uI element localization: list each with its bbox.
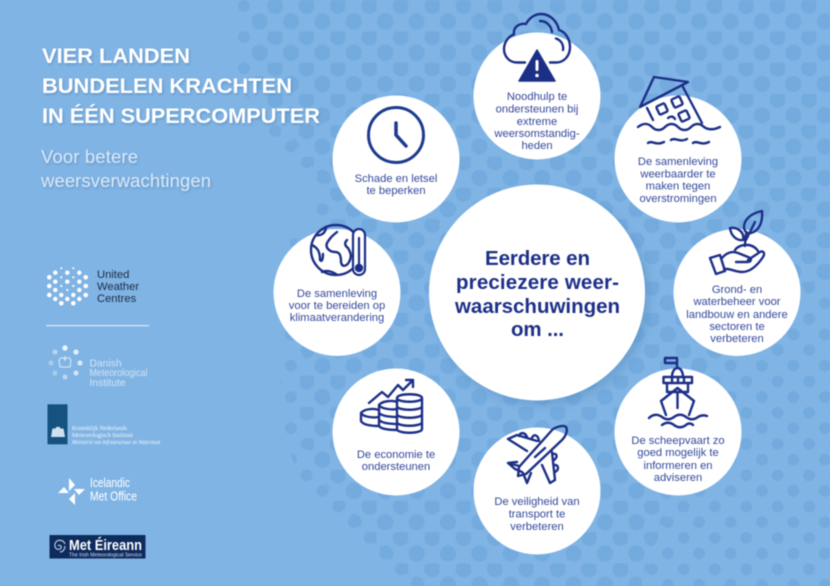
title: VIER LANDEN xyxy=(42,44,190,68)
title: IN ÉÉN SUPERCOMPUTER xyxy=(42,103,320,128)
panel: central message xyxy=(429,184,649,405)
text: emergency aid: weersomstandig- xyxy=(493,128,580,140)
panel: shipping xyxy=(614,358,742,496)
logo: Met Eireann xyxy=(50,535,146,558)
panel: emergency aid xyxy=(474,14,600,160)
icon: clock xyxy=(368,108,424,162)
heading: central text: Eerdere en xyxy=(485,247,590,270)
text: land and water management: sectoren te xyxy=(709,321,765,333)
panel: damage and injury xyxy=(332,96,460,222)
subtitle: weersverwachtingen xyxy=(40,170,211,191)
text: economy: De economie te xyxy=(357,449,435,461)
text: emergency aid: ondersteunen bij xyxy=(496,104,578,116)
heading: central text: preciezere weer- xyxy=(456,271,619,294)
text: emergency aid xyxy=(493,91,580,152)
subtitle xyxy=(40,146,211,191)
icon: cloud with warning xyxy=(504,14,570,81)
panel: economy xyxy=(332,368,460,496)
text: flood resilience: overstromingen xyxy=(639,193,717,205)
logo: Icelandic Met Office: Icelandic xyxy=(90,476,130,490)
text: transport safety: verbeteren xyxy=(510,521,564,533)
logo: KNMI: Ministerie van Infrastructuur en Waterstaat xyxy=(71,439,160,446)
logo: United Weather Centres xyxy=(47,267,139,306)
logo: Danish Meteorological Institute: Institute xyxy=(90,378,126,389)
text: transport safety: De veiligheid van xyxy=(494,496,580,508)
panel: transport safety xyxy=(474,426,600,554)
icon: airplane xyxy=(508,426,567,483)
text: land and water management: waterbeheer voor xyxy=(692,296,781,308)
panel: land and water management xyxy=(674,211,800,356)
text: climate change: klimaatverandering xyxy=(290,312,384,324)
text: transport safety xyxy=(494,496,580,533)
text: climate change: De samenleving xyxy=(297,288,377,300)
text: transport safety: transport te xyxy=(509,508,565,520)
text: land and water management: landbouw en andere xyxy=(686,309,788,321)
text: land and water management: verbeteren xyxy=(710,333,764,345)
logo: Danish Meteorological Institute: Danish xyxy=(90,358,122,370)
logo: United Weather Centres: United xyxy=(97,269,129,281)
text: climate change: voor te bereiden op xyxy=(289,300,385,312)
logo: Icelandic Met Office: Met Office xyxy=(90,490,137,504)
logo: Met Eireann: The Irish Meteorological Service xyxy=(69,552,142,558)
icon: hand holding plant xyxy=(710,211,764,274)
text: emergency aid: heden xyxy=(521,140,553,152)
text: flood resilience xyxy=(638,156,718,205)
text: emergency aid: Noodhulp te xyxy=(507,91,567,103)
text: shipping: informeren en xyxy=(643,460,713,472)
logo: Danish Meteorological Institute xyxy=(48,345,148,389)
text: economy: ondersteunen xyxy=(362,461,430,473)
text: damage and injury xyxy=(355,173,437,197)
icon: ship xyxy=(649,358,707,427)
text: flood resilience: weerbaarder te xyxy=(639,168,716,180)
icon: flooded house xyxy=(638,77,720,143)
logo: Danish Meteorological Institute: Meteorological xyxy=(90,368,148,379)
logo: Icelandic Met Office xyxy=(58,476,137,505)
logo: KNMI xyxy=(48,404,160,446)
icon: globe with thermometer xyxy=(311,225,365,275)
text: economy xyxy=(357,449,435,473)
text: shipping: De scheepvaart zo xyxy=(631,435,725,447)
logo: KNMI: Meteorologisch Instituut xyxy=(72,433,133,439)
text: damage and injury: te beperken xyxy=(366,185,426,197)
title: BUNDELEN KRACHTEN xyxy=(42,74,292,98)
text: shipping xyxy=(631,435,725,484)
title xyxy=(42,44,320,128)
text: land and water management xyxy=(686,284,788,345)
panel: climate change xyxy=(274,225,400,356)
text: land and water management: Grond- en xyxy=(712,284,762,296)
text: emergency aid: extreme xyxy=(517,116,557,128)
icon: coins and rising arrow xyxy=(361,380,422,433)
text: climate change xyxy=(289,288,385,324)
heading: central text: waarschuwingen xyxy=(454,295,620,318)
text: flood resilience: maken tegen xyxy=(646,180,710,192)
logo: Met Eireann: Met Éireann xyxy=(69,537,142,554)
text: shipping: adviseren xyxy=(654,472,702,484)
subtitle: Voor betere xyxy=(41,146,138,167)
heading: central text xyxy=(454,247,620,341)
text: damage and injury: Schade en letsel xyxy=(355,173,437,185)
text: flood resilience: De samenleving xyxy=(638,156,718,168)
heading: central text: om ... xyxy=(511,318,564,341)
text: shipping: goed mogelijk te xyxy=(637,447,719,459)
panel: flood resilience xyxy=(614,77,742,222)
logo: KNMI: Koninklijk Nederlands xyxy=(72,426,128,432)
logo: United Weather Centres: Centres xyxy=(97,293,137,305)
logo: United Weather Centres: Weather xyxy=(97,281,139,293)
